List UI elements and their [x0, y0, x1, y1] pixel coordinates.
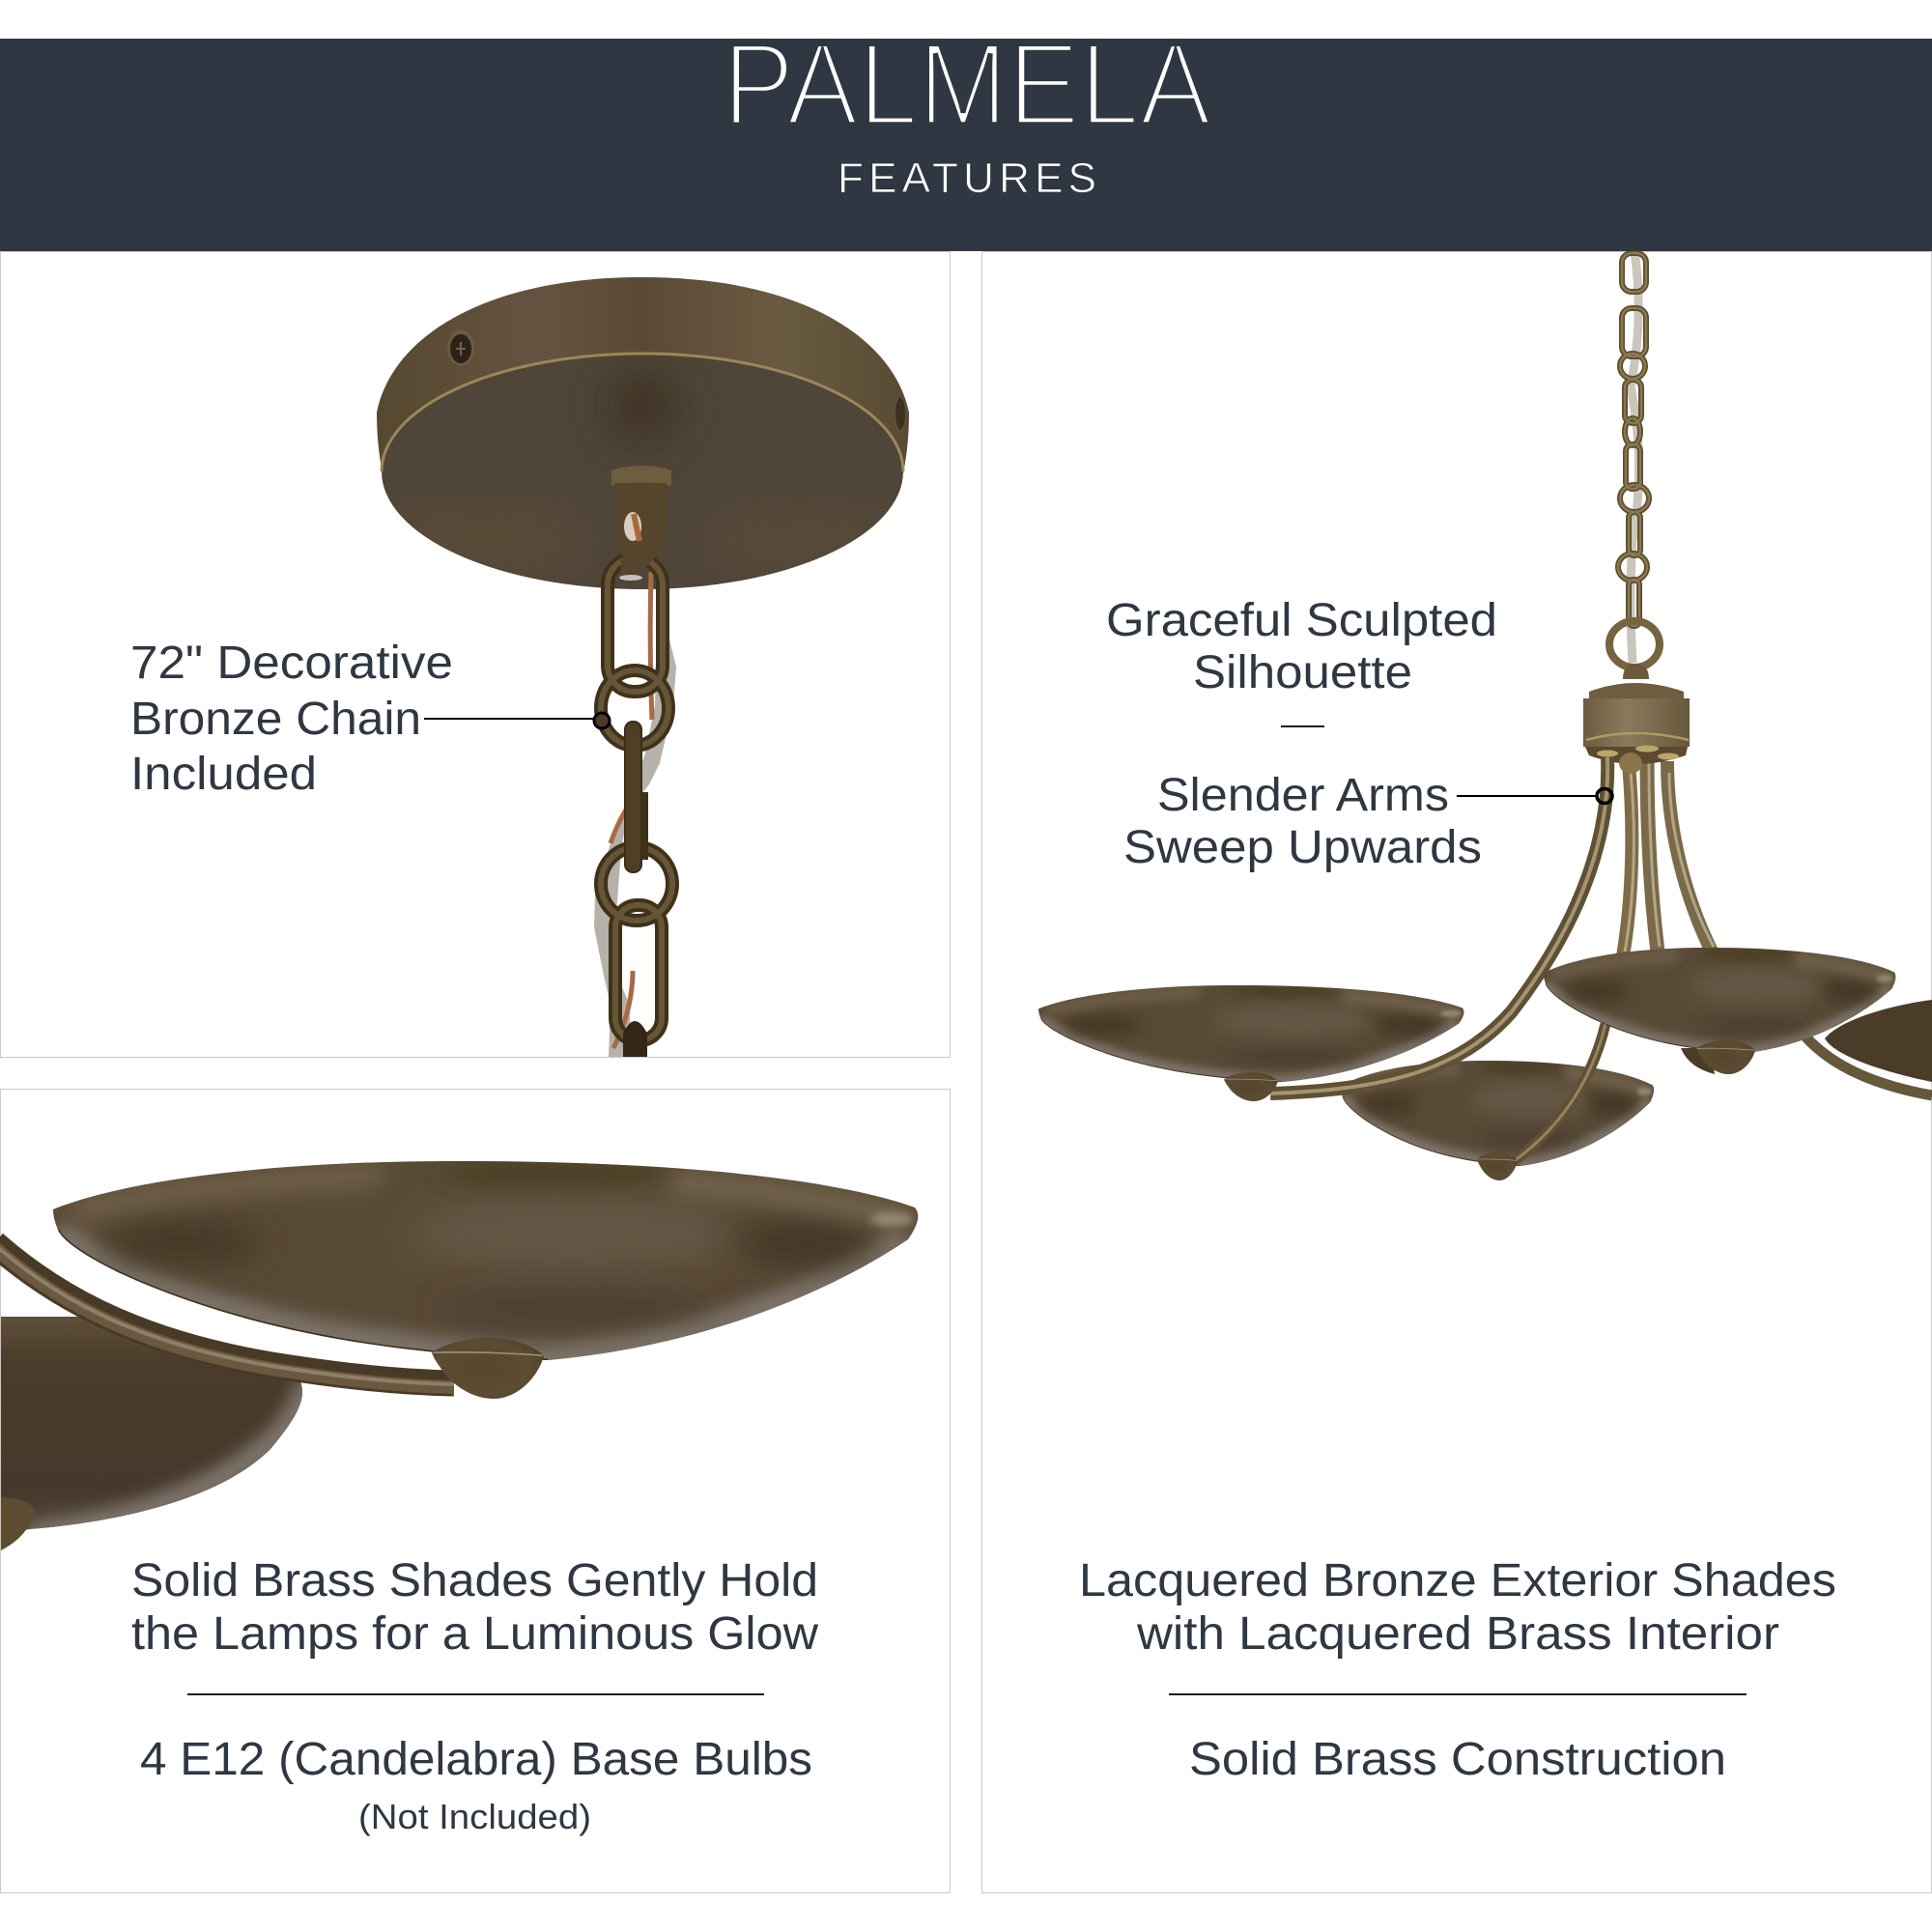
text: shades feature: the Lamps for a Luminous Glow: [131, 1608, 818, 1660]
icon: canopy screw left: [447, 329, 474, 366]
icon: ceiling canopy: [377, 277, 909, 589]
panel: top left, ceiling canopy and chain: [0, 251, 951, 1057]
text: chain feature: Bronze Chain: [130, 694, 421, 745]
icon: front shade finial: [1696, 1040, 1755, 1074]
text: bulbs: (Not Included): [358, 1797, 591, 1836]
text: finish feature: with Lacquered Brass Interior: [1136, 1608, 1779, 1660]
text: construction: Solid Brass Construction: [1189, 1734, 1726, 1785]
icon: canopy screw right: [895, 396, 906, 431]
text: silhouette feature: Graceful Sculpted: [1106, 595, 1497, 646]
text: silhouette feature: [1106, 595, 1497, 698]
icon: rear shade: [1, 1317, 309, 1550]
icon: left shade finial: [1224, 1072, 1278, 1101]
text: bulbs: 4 E12 (Candelabra) Base Bulbs: [140, 1734, 812, 1785]
text: chain feature: 72" Decorative: [130, 638, 453, 689]
text: chain feature: Included: [130, 749, 317, 800]
icon: upswept arms rear: [1623, 755, 1714, 956]
icon: rear finial behind front shade: [1681, 1048, 1715, 1074]
text: bulbs: [140, 1734, 812, 1836]
text: finish feature: [1079, 1555, 1836, 1660]
panel: right, full chandelier: [981, 251, 1932, 1893]
text: arms feature: Sweep Upwards: [1123, 822, 1482, 873]
header banner: [0, 18, 1932, 251]
callout: chain leader line: [424, 713, 610, 728]
title: PALMELA: [723, 18, 1212, 150]
icon: central hub: [1583, 664, 1690, 774]
icon: center shade arm and finial: [1477, 1024, 1605, 1180]
text: chain feature: [130, 638, 453, 800]
text: finish feature: Lacquered Bronze Exterior Shades: [1079, 1555, 1836, 1606]
icon: decorative bronze chain: [594, 466, 676, 1057]
panel: bottom left, shade close-up: [0, 1090, 951, 1893]
icon: left shade: [1038, 985, 1463, 1082]
icon: front shade: [1544, 948, 1895, 1053]
text: arms feature: [1123, 770, 1482, 873]
icon: shade finial: [432, 1338, 544, 1399]
callout: arms leader line: [1457, 788, 1612, 804]
text: shades feature: [131, 1555, 818, 1660]
icon: large brass shade: [53, 1161, 918, 1360]
icon: left arm: [1270, 757, 1607, 1094]
text: shades feature: Solid Brass Shades Gently Hold: [131, 1555, 818, 1606]
icon: curved arm: [0, 1243, 454, 1387]
icon: far right shade and arm: [1804, 1000, 1932, 1095]
subtitle: FEATURES: [838, 155, 1096, 202]
text: arms feature: Slender Arms: [1157, 770, 1449, 821]
icon: center shade: [1341, 1061, 1654, 1166]
icon: chandelier chain: [1609, 251, 1660, 668]
text: silhouette feature: Silhouette: [1193, 647, 1412, 698]
